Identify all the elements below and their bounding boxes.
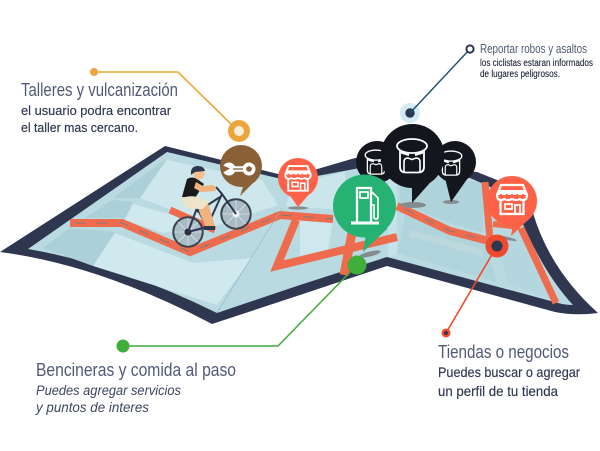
bike front wheel [221, 199, 251, 229]
map fold [217, 208, 282, 313]
rider shorts [181, 196, 209, 209]
text: workshops: Talleres y vulcanización [21, 80, 178, 100]
pin: shop [278, 158, 318, 207]
text: workshops [21, 80, 178, 135]
road dashes [75, 209, 497, 252]
rider leg [197, 203, 215, 228]
pin: bandit right [434, 141, 476, 202]
leader: workshop [90, 68, 250, 142]
text: gas stations: y puntos de interes [35, 400, 149, 415]
text: gas stations: Puedes agregar servicios [36, 383, 181, 398]
text: gas stations [35, 360, 236, 415]
bike rear wheel [173, 217, 203, 247]
leader: report [400, 45, 474, 123]
text: shops [438, 342, 580, 399]
map blocks [43, 158, 553, 305]
map sheet [28, 152, 573, 313]
text: shops: Puedes buscar o agregar [438, 364, 580, 380]
map border [0, 146, 598, 324]
text: report [480, 42, 593, 80]
text: shops: Tiendas o negocios [438, 342, 569, 362]
text: workshops: el taller mas cercano. [21, 120, 138, 135]
icon: wrench [222, 162, 256, 176]
rider head [194, 168, 204, 180]
pin: bandit left [356, 141, 398, 183]
text: report: de lugares peligrosos. [480, 69, 560, 80]
pin shadows [288, 200, 517, 259]
pin: bandit center [380, 124, 444, 203]
pin: gas station [333, 174, 396, 252]
text: workshops: el usuario podra encontrar [21, 103, 172, 118]
pin: shop large [487, 176, 537, 236]
pin: repair shop wrench [220, 145, 262, 196]
text: gas stations: Bencineras y comida al paso [36, 360, 236, 380]
icon: fuel pump [351, 188, 379, 223]
text: shops: un perfil de tu tienda [438, 383, 558, 399]
rider arm [194, 182, 216, 192]
leader: shops [442, 234, 508, 338]
rider torso [182, 178, 204, 198]
helmet [191, 166, 205, 175]
map [0, 146, 598, 324]
cyclist [173, 166, 251, 247]
bike frame [188, 187, 236, 232]
leader: gas station [116, 256, 366, 352]
roads [70, 182, 556, 303]
